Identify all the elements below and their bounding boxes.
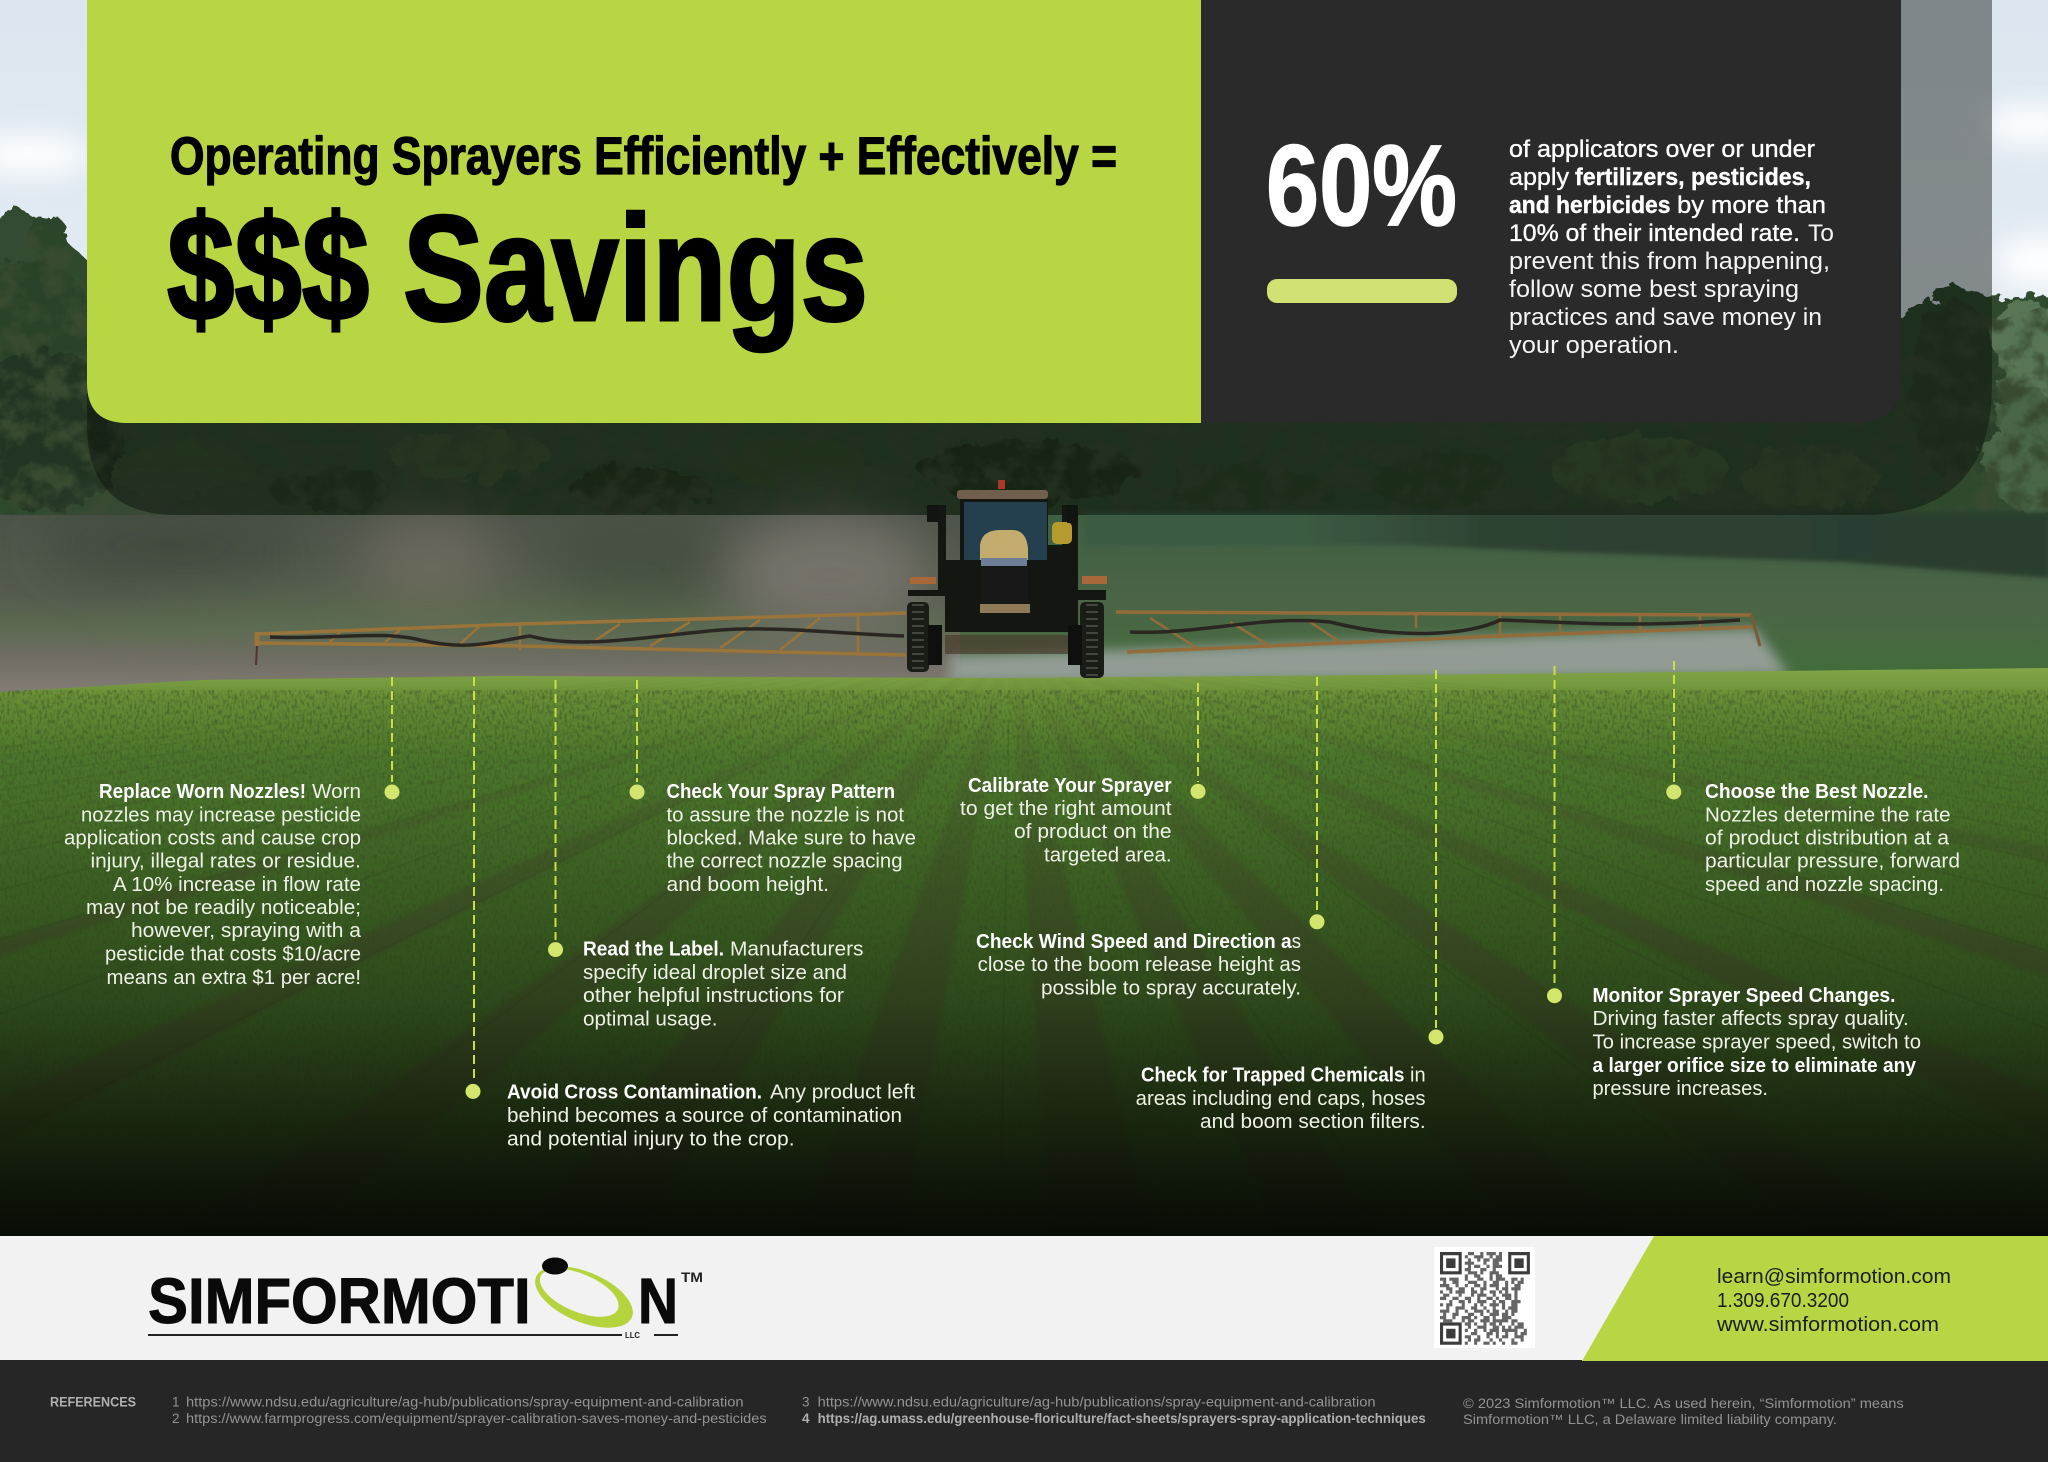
header panel: green title: [87, 0, 1201, 423]
crop field: [0, 668, 2048, 1194]
copyright: Simformotion™ LLC, a Delaware limited liability company.: [1463, 1412, 1837, 1427]
green contact block: [1582, 1236, 2048, 1361]
hood stripe: [981, 558, 1027, 566]
statistic paragraph: practices and save money in: [1509, 304, 1822, 331]
reference list: 4: [802, 1411, 810, 1426]
tree canopy shading: [0, 226, 2048, 512]
callout: check wind speed and direction: possible to spray accurately.: [1041, 977, 1301, 999]
callout: read the label: [548, 680, 864, 1031]
sky with clouds: [0, 0, 2048, 420]
big number 60%: 60%: [1266, 122, 1457, 250]
grille: [982, 567, 1028, 604]
callout: read the label: optimal usage.: [583, 1009, 718, 1031]
green bar: [1267, 279, 1457, 303]
callout: choose the best nozzle: [1666, 661, 1960, 896]
statistic paragraph: by more than: [1677, 192, 1826, 219]
reference list: 2: [172, 1411, 180, 1426]
reference list: [172, 1395, 1426, 1426]
green contact block: 1.309.670.3200: [1717, 1289, 1849, 1312]
callout: replace worn nozzles: Replace Worn Nozzles!: [99, 781, 306, 803]
footer dark band: references: [0, 1360, 2048, 1462]
callout: check for trapped chemicals: in: [1410, 1064, 1426, 1086]
translucent dark overlay behind header: [87, 0, 1992, 515]
green contact block: learn@simformotion.com: [1717, 1265, 1951, 1288]
green contact block: www.simformotion.com: [1716, 1313, 1939, 1336]
statistic paragraph: 10% of their intended rate.: [1509, 220, 1800, 247]
mirrors: [927, 505, 1078, 523]
reference list: https://www.ndsu.edu/agriculture/ag-hub/publications/spray-equipment-and-calibration: [186, 1395, 744, 1410]
logo: Simformotion: LLC: [625, 1331, 640, 1340]
statistic paragraph: follow some best spraying: [1509, 276, 1799, 303]
callout: monitor sprayer speed changes: Monitor Sprayer Speed Changes.: [1592, 985, 1896, 1007]
bottom darkening: [0, 678, 2048, 1238]
callout: replace worn nozzles: however, spraying with a: [131, 920, 362, 942]
callout: calibrate your sprayer: to get the right amount: [960, 798, 1172, 820]
statistic paragraph: and herbicides: [1509, 192, 1670, 219]
mottled crowns below the header: [110, 442, 250, 498]
statistic paragraph: [1509, 136, 1834, 359]
tree line: [0, 212, 2048, 600]
statistic paragraph: of applicators over or under: [1509, 136, 1815, 163]
callout: replace worn nozzles: pesticide that costs $10/acre: [105, 944, 361, 966]
callout: check for trapped chemicals: areas including end caps, hoses: [1136, 1088, 1426, 1110]
cab window: [964, 502, 1047, 560]
crop rows: [9, 862, 1930, 888]
callout: replace worn nozzles: A 10% increase in flow rate: [113, 874, 361, 896]
reference list: https://www.farmprogress.com/equipment/sprayer-calibration-saves-money-and-pesticides: [186, 1411, 767, 1426]
callout: replace worn nozzles: Worn: [312, 781, 361, 803]
callout: choose the best nozzle: Choose the Best Nozzle.: [1705, 781, 1928, 803]
callout: avoid cross contamination: Any product left: [770, 1082, 915, 1104]
callout: avoid cross contamination: and potential injury to the crop.: [507, 1128, 795, 1150]
yellow tank: [1052, 522, 1072, 544]
callout: check your spray pattern: to assure the nozzle is not: [666, 804, 904, 826]
soil streaks: [0, 734, 2048, 1057]
hood: [980, 530, 1028, 560]
callout: replace worn nozzles: may not be readily noticeable;: [86, 897, 361, 919]
footer white band: [0, 1236, 2048, 1361]
callout: check for trapped chemicals: Check for Trapped Chemicals: [1141, 1064, 1404, 1086]
copyright: © 2023 Simformotion™ LLC. As used herein, “Simformotion” means: [1463, 1396, 1904, 1411]
callout: check wind speed and direction: [976, 677, 1324, 999]
callout: read the label: Manufacturers: [730, 939, 864, 961]
statistic paragraph: apply: [1509, 164, 1569, 191]
callout: replace worn nozzles: application costs and cause crop: [64, 827, 361, 849]
green far field on the right: [960, 515, 2048, 695]
callout: read the label: other helpful instructions for: [583, 985, 844, 1007]
statistic paragraph: prevent this from happening,: [1509, 248, 1830, 275]
reference list: https://www.ndsu.edu/agriculture/ag-hub/publications/spray-equipment-and-calibration: [818, 1395, 1376, 1410]
far hedge line: [1085, 512, 2048, 578]
statistic paragraph: To: [1808, 220, 1834, 247]
callout: monitor sprayer speed changes: pressure increases.: [1592, 1078, 1768, 1100]
logo: Simformotion: TM: [681, 1269, 703, 1285]
callout: check your spray pattern: and boom height.: [666, 874, 829, 896]
callout: check your spray pattern: the correct nozzle spacing: [666, 851, 902, 873]
spray mist under right boom and tractor: [950, 628, 1790, 684]
callout: monitor sprayer speed changes: To increase sprayer speed, switch to: [1592, 1032, 1921, 1054]
callout: monitor sprayer speed changes: a larger orifice size to eliminate any: [1592, 1055, 1917, 1077]
callout: avoid cross contamination: Avoid Cross Contamination.: [507, 1082, 762, 1104]
callout: choose the best nozzle: of product distribution at a: [1705, 827, 1950, 849]
sprayer machine: [256, 480, 1760, 678]
callout: calibrate your sprayer: Calibrate Your Sprayer: [968, 775, 1172, 797]
callout: avoid cross contamination: behind becomes a source of contamination: [507, 1105, 902, 1127]
callout: monitor sprayer speed changes: [1547, 666, 1921, 1100]
QR code: [1434, 1247, 1535, 1348]
callout: avoid cross contamination: [466, 677, 915, 1150]
callout: calibrate your sprayer: of product on the: [1014, 821, 1172, 843]
callout: choose the best nozzle: particular pressure, forward: [1705, 851, 1960, 873]
spray dust plumes: [40, 513, 930, 635]
subtitle: Operating Sprayers Efficiently + Effectively =: [170, 127, 1117, 186]
header panel: dark statistic: [1201, 0, 1901, 423]
callout: replace worn nozzles: [64, 677, 400, 989]
statistic paragraph: your operation.: [1509, 332, 1679, 359]
right boom: [1116, 612, 1760, 652]
callout: check wind speed and direction: Check Wind Speed and Direction a: [976, 931, 1292, 953]
callout: calibrate your sprayer: [960, 683, 1206, 866]
cab roof: [957, 490, 1048, 499]
wheels: [907, 602, 1104, 678]
references label: REFERENCES: [50, 1395, 136, 1410]
reference list: 3: [802, 1395, 810, 1410]
callout: choose the best nozzle: speed and nozzle spacing.: [1705, 874, 1944, 896]
tan bumper: [980, 604, 1030, 613]
rear chassis: [945, 635, 1075, 654]
grass texture: [0, 690, 2048, 1238]
callout: check your spray pattern: [630, 680, 916, 896]
callout: monitor sprayer speed changes: Driving faster affects spray quality.: [1592, 1008, 1909, 1030]
left boom: [256, 613, 906, 665]
reference list: 1: [172, 1395, 180, 1410]
callout: replace worn nozzles: nozzles may increase pesticide: [81, 804, 361, 826]
copyright: [1463, 1396, 1904, 1427]
callout: calibrate your sprayer: targeted area.: [1044, 844, 1172, 866]
callout: check for trapped chemicals: [1136, 670, 1444, 1133]
lamps: [910, 576, 1107, 584]
statistic paragraph: fertilizers, pesticides,: [1575, 164, 1811, 191]
logo: Simformotion: N: [638, 1265, 678, 1337]
callout: read the label: specify ideal droplet size and: [583, 962, 847, 984]
callout: check your spray pattern: Check Your Spray Pattern: [666, 781, 895, 803]
logo: Simformotion: [148, 1254, 703, 1340]
callout: replace worn nozzles: means an extra $1 per acre!: [106, 967, 361, 989]
logo: Simformotion: SIMFORMOTI: [148, 1265, 531, 1337]
callout: check for trapped chemicals: and boom section filters.: [1200, 1111, 1426, 1133]
callout: check your spray pattern: blocked. Make sure to have: [666, 827, 916, 849]
tractor body: [908, 498, 1106, 632]
callout: read the label: Read the Label.: [583, 939, 724, 961]
reference list: https://ag.umass.edu/greenhouse-floriculture/fact-sheets/sprayers-spray-application-techniques: [818, 1411, 1426, 1426]
main title: $$$ Savings: [167, 184, 868, 352]
callout: replace worn nozzles: injury, illegal rates or residue.: [90, 851, 361, 873]
callout: check wind speed and direction: close to the boom release height as: [978, 954, 1301, 976]
hazy left field: [0, 515, 960, 695]
callout: choose the best nozzle: Nozzles determine the rate: [1705, 804, 1950, 826]
beacon: [998, 480, 1005, 489]
callout: check wind speed and direction: s: [1292, 931, 1301, 953]
